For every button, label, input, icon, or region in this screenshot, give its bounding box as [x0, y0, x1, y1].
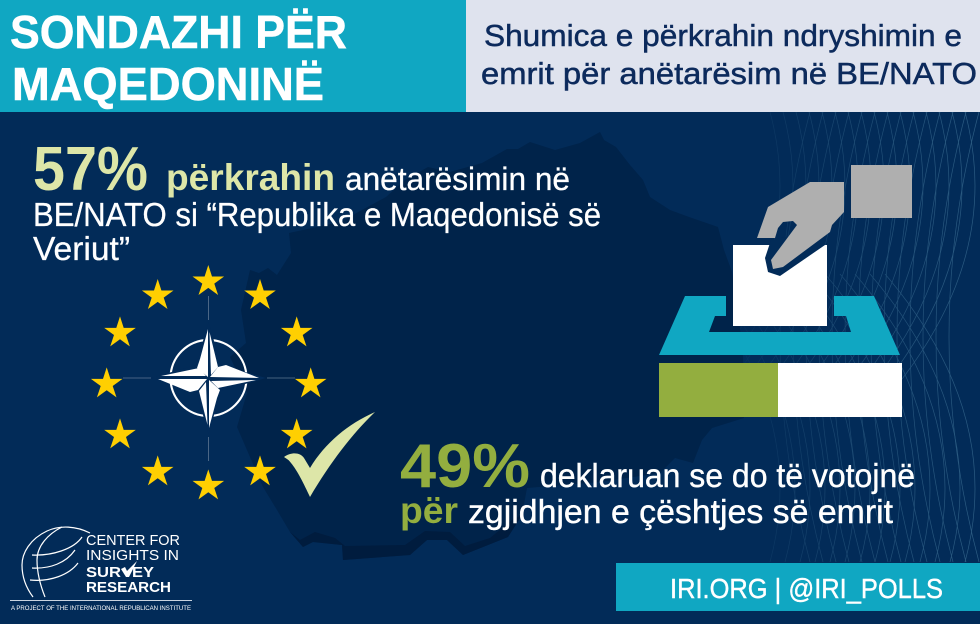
header panel: title [0, 0, 466, 112]
ballot box top [659, 296, 900, 355]
header panel: subtitle [466, 0, 980, 112]
icon: check mark [284, 412, 375, 497]
statistic: 57% support: anëtarësimin në [345, 161, 570, 197]
ballot paper [733, 245, 827, 326]
map silhouette of Macedonia [230, 132, 744, 560]
statistic: 49% will vote: për [400, 490, 458, 531]
logo: Center for Insights in Survey Research: CENTER FOR [86, 532, 180, 549]
statistic: 49% will vote [400, 432, 915, 531]
logo: Center for Insights in Survey Research [10, 527, 192, 612]
logo: Center for Insights in Survey Research: SUR [86, 564, 121, 581]
icon: NATO compass [123, 296, 295, 461]
logo: Center for Insights in Survey Research: EY [132, 564, 154, 581]
statistic: 49% will vote: deklaruan se do të votojnë [540, 457, 915, 494]
hand [757, 182, 844, 269]
statistic: 57% support: përkrahin [166, 157, 335, 198]
logo: Center for Insights in Survey Research: RESEARCH [86, 579, 171, 596]
statistic: 49% will vote: 49% [400, 432, 530, 501]
logo: Center for Insights in Survey Research: INSIGHTS IN [86, 547, 179, 564]
header panel: subtitle: Shumica e përkrahin ndryshimin e [484, 18, 962, 53]
hand outline cut-out [765, 236, 827, 276]
ballot box front white [778, 363, 902, 417]
logo: Center for Insights in Survey Research: A PROJECT OF THE INTERNATIONAL REPUBLICAN INSTITUTE [11, 605, 191, 612]
statistic: 57% support [33, 135, 601, 267]
header panel: subtitle: emrit për anëtarësim në BE/NATO [481, 56, 977, 91]
ballot box front green [659, 363, 778, 417]
icon: ballot box and hand [659, 165, 912, 417]
check in Survey [121, 561, 137, 577]
statistic: 57% support: 57% [33, 135, 148, 204]
header panel: title: MAQEDONINË [12, 58, 324, 110]
background mesh pattern [759, 112, 980, 562]
statistic: 49% will vote: zgjidhjen e çështjes së emrit [468, 493, 893, 530]
footer link bar [616, 563, 980, 611]
header panel: title: SONDAZHI PËR [10, 6, 347, 58]
statistic: 57% support: BE/NATO si “Republika e Maqedonisë së [33, 196, 601, 233]
statistic: 57% support: Veriut” [33, 230, 130, 267]
globe [22, 527, 90, 597]
footer link bar: IRI.ORG | @IRI_POLLS [670, 573, 943, 604]
sleeve cuff [851, 165, 912, 218]
icon: EU stars ring [91, 265, 327, 499]
